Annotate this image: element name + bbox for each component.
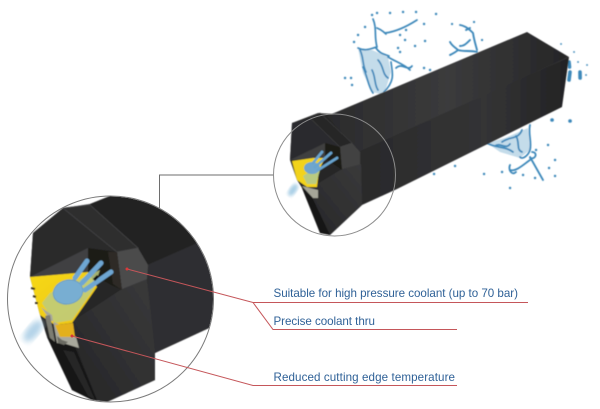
water splash (345, 12, 587, 188)
body: front face (305, 164, 362, 235)
label: high pressure coolant: Suitable for high pressure coolant (up to 70 bar) (274, 287, 518, 300)
small coolant spray (286, 182, 300, 198)
small teeth (302, 186, 318, 198)
magnified: lower dark flank (47, 337, 97, 400)
magnified: collar strip (63, 205, 138, 252)
magnified: top-left face (30, 210, 61, 276)
zoom circle: small (274, 114, 396, 236)
magnified: collar front (117, 248, 148, 290)
leader: coolant thru (253, 302, 457, 330)
leader lines (72, 269, 528, 386)
small screw (304, 162, 320, 174)
magnified: teeth (41, 307, 79, 348)
body: collar strip (310, 113, 352, 147)
magnified: teeth notches (31, 288, 38, 303)
magnified: insert coolant haze (42, 270, 100, 323)
magnified: pocket (88, 248, 118, 288)
insert small (292, 158, 325, 187)
magnified: front face (86, 280, 155, 402)
leader: edge temperature (72, 336, 457, 386)
magnified: coolant jets (75, 261, 111, 290)
small coolant jets (313, 152, 337, 170)
body: side face (358, 57, 569, 205)
magnified: gray face (30, 248, 88, 277)
body: gray face (290, 143, 325, 160)
body: lower dark flank (302, 188, 330, 235)
tool holder body (286, 32, 569, 235)
body: collar front (340, 143, 360, 170)
leader: high pressure coolant (127, 269, 528, 302)
body: silhouette backing (290, 113, 362, 235)
label: edge temperature: Reduced cutting edge temperature (274, 371, 455, 384)
magnified: silhouette backing (30, 196, 208, 402)
connector line (160, 175, 273, 208)
magnified: insert (30, 272, 97, 325)
splash: upper left (345, 12, 436, 95)
small insert highlight (303, 170, 320, 184)
leader dots (70, 268, 128, 338)
body: top face (327, 32, 569, 153)
body: pocket (325, 143, 342, 170)
label: coolant thru: Precise coolant thru (274, 315, 375, 328)
splash: upper right (450, 22, 587, 121)
splash: lower (434, 125, 555, 188)
body: head top-left face (290, 118, 340, 160)
magnified: top block (90, 196, 110, 204)
magnified: coolant spray (20, 317, 46, 345)
magnified: right side face (148, 244, 213, 353)
magnified: jet shadow (94, 276, 98, 280)
magnified view (8, 188, 222, 402)
magnified: screw (52, 278, 84, 306)
